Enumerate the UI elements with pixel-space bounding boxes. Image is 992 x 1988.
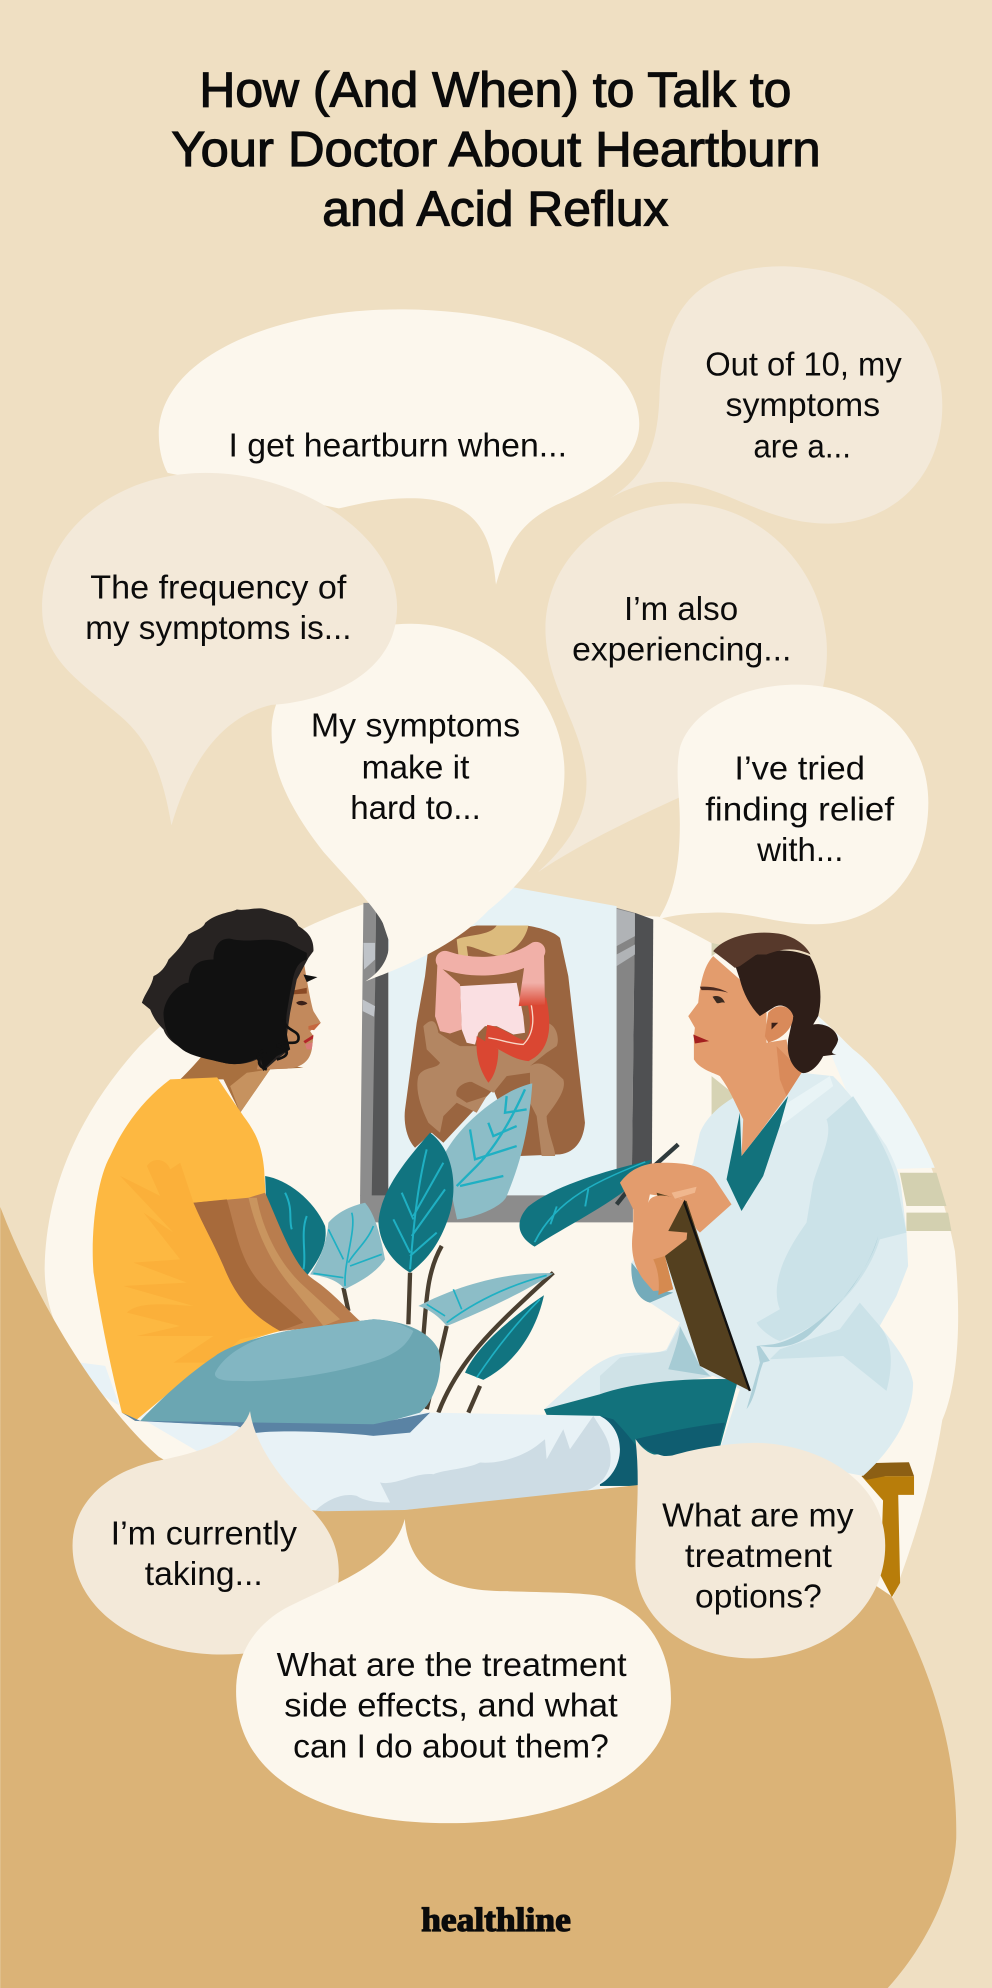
leaf: right dark [519, 1160, 652, 1247]
speech bubble: tried finding relief: finding relief [705, 790, 895, 827]
speech bubble: also experiencing: I’m also [624, 590, 738, 627]
leaf: small light [418, 1273, 553, 1326]
illustration: doctor consultation scene [80, 873, 951, 1597]
torso [405, 926, 585, 1156]
leaf: large light [443, 1083, 532, 1219]
speech bubble: I get heartburn when: I get heartburn when... [228, 426, 567, 463]
speech bubble: treatment options: options? [695, 1578, 822, 1615]
stool [862, 1462, 914, 1597]
speech bubble: treatment options: treatment [685, 1537, 832, 1574]
title [171, 63, 821, 237]
clipboard [657, 1193, 750, 1391]
speech bubble: symptoms make it hard: make it [362, 748, 469, 785]
healthline logo: healthline [421, 1901, 571, 1939]
anatomy poster [360, 873, 653, 1222]
speech bubble: side effects: can I do about them? [293, 1727, 609, 1764]
coat shading [757, 1096, 906, 1341]
speech bubble: side effects: What are the treatment [277, 1646, 627, 1683]
patient hair [142, 908, 313, 1071]
speech bubble: I get heartburn when [159, 309, 639, 584]
speech bubble: currently taking: taking... [145, 1555, 263, 1592]
scrubs neckline [727, 1096, 788, 1211]
speech bubble: symptoms make it hard: hard to... [350, 789, 481, 826]
leaf: center dark [378, 1133, 453, 1273]
wall and window details [712, 943, 951, 1231]
pelvis bones [417, 1021, 564, 1156]
poster frame left [360, 903, 376, 1196]
speech bubble: tried finding relief: with... [756, 831, 843, 868]
leaf: left light [310, 1203, 385, 1289]
speech bubble: frequency: The frequency of [90, 568, 347, 605]
speech bubble: out of 10: symptoms [725, 386, 880, 423]
title: and Acid Reflux [322, 182, 669, 237]
speech bubble: currently taking [73, 1411, 339, 1655]
leaf: left dark [265, 1176, 326, 1276]
liver [457, 926, 528, 958]
patient shirt [93, 1077, 280, 1421]
doctor trousers [544, 1379, 738, 1486]
poster frame right and bottom [617, 908, 635, 1199]
colon, red [486, 999, 540, 1051]
speech bubble: symptoms make it hard [272, 624, 564, 981]
title: How (And When) to Talk to [199, 63, 791, 117]
doctor hair [735, 950, 838, 1073]
speech bubble: frequency [42, 473, 397, 825]
speech bubble: tried finding relief: I’ve tried [734, 750, 865, 787]
speech bubble: also experiencing: experiencing... [572, 631, 791, 668]
speech bubble: symptoms make it hard: My symptoms [311, 707, 520, 744]
speech bubble: currently taking: I’m currently [111, 1514, 297, 1551]
speech bubble: out of 10: Out of 10, my [705, 345, 902, 382]
colon, pink [435, 964, 462, 1033]
plant stems [343, 1246, 553, 1413]
doctor ear [765, 1006, 793, 1043]
speech bubble: treatment options: What are my [662, 1496, 854, 1533]
patient [93, 908, 440, 1436]
tan foreground shape [0, 1207, 956, 1988]
speech bubble: out of 10: are a... [753, 428, 851, 465]
speech bubble: tried finding relief [658, 685, 928, 924]
patient head [142, 908, 321, 1113]
doctor coat [544, 1073, 913, 1476]
small intestine [460, 983, 525, 1044]
patient arm [193, 1193, 360, 1331]
doctor lower hand [632, 1196, 687, 1291]
doctor [544, 933, 913, 1486]
poster panel [388, 873, 617, 1196]
leaf: small dark [465, 1295, 544, 1380]
bed [80, 1363, 620, 1519]
doctor upper hand [620, 1163, 732, 1233]
speech bubble: side effects [236, 1519, 671, 1823]
scene backdrop blob [45, 903, 958, 1610]
bed shadow [313, 1416, 611, 1519]
plant [265, 1083, 652, 1413]
speech bubble: frequency: my symptoms is... [85, 609, 351, 646]
doctor neck and face [688, 933, 838, 1156]
patient trousers [140, 1319, 440, 1428]
colon, fading [519, 954, 545, 1006]
speech bubble: side effects: side effects, and what [284, 1687, 618, 1724]
title: Your Doctor About Heartburn [171, 122, 821, 177]
pen [617, 1144, 678, 1204]
speech bubble: treatment options [635, 1439, 885, 1658]
speech bubble: out of 10 [610, 266, 942, 524]
speech bubble: also experiencing [538, 503, 827, 872]
